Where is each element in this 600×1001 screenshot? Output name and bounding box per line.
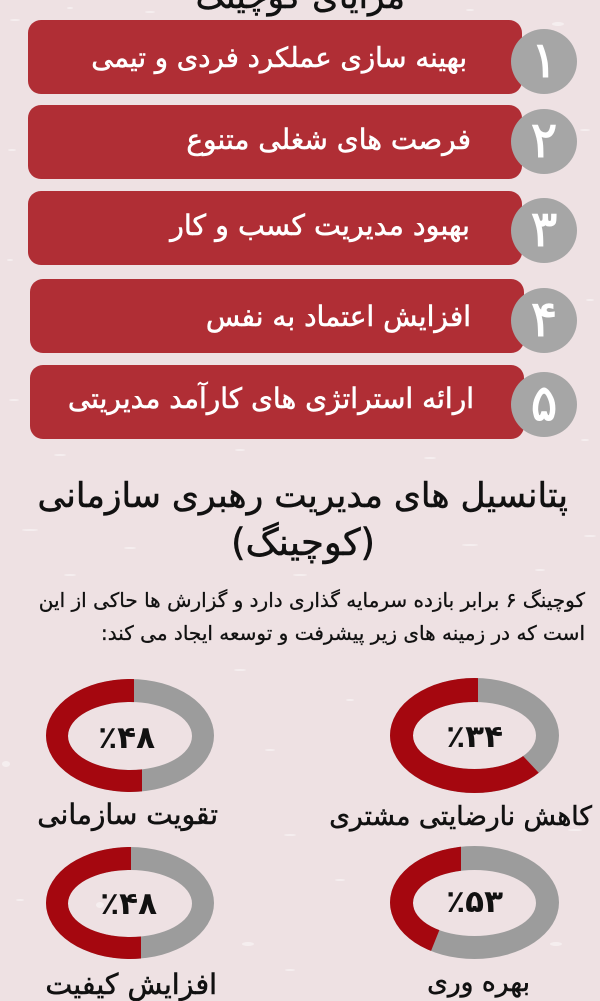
item 3 number: ۳ <box>531 200 557 258</box>
label: organisational strengthening: تقویت سازمانی <box>37 798 218 831</box>
section heading <box>38 476 568 564</box>
heading line 1: پتانسیل های مدیریت رهبری سازمانی <box>38 476 568 516</box>
list item 1 <box>28 20 577 94</box>
item 4 number: ۴ <box>531 290 557 348</box>
item 2 text: فرصت های شغلی متنوع <box>186 123 471 156</box>
item 5 number <box>511 372 577 437</box>
donut: productivity 53 <box>390 846 559 959</box>
value: 48 percent quality: ٪۴۸ <box>100 886 157 922</box>
item 5 bar <box>30 365 524 439</box>
item 4 text: افزایش اعتماد به نفس <box>206 300 471 333</box>
list item 3 <box>28 191 577 265</box>
item 4 number <box>511 288 577 353</box>
item 1 number: ۱ <box>531 31 557 89</box>
paragraph line 2: است که در زمینه های زیر پیشرفت و توسعه ایجاد می کند: <box>101 621 585 645</box>
paragraph line 1: کوچینگ ۶ برابر بازده سرمایه گذاری دارد و گزارش ها حاکی از این <box>39 588 585 612</box>
value: 53 percent: ٪۵۳ <box>446 884 503 920</box>
label: customer dissatisfaction: کاهش نارضایتی مشتری <box>329 801 592 832</box>
donut: quality improvement 48 <box>46 847 214 959</box>
label: productivity: بهره وری <box>427 967 530 998</box>
value: 34 percent: ٪۳۴ <box>446 719 503 755</box>
donut: organisational strengthening 48 <box>46 679 214 792</box>
heading line 2: (کوچینگ) <box>231 521 375 564</box>
donut: customer dissatisfaction 34 <box>390 678 559 793</box>
item 4 bar <box>30 279 524 353</box>
intro paragraph <box>39 588 586 646</box>
item 2 number: ۲ <box>531 111 557 169</box>
item 3 text: بهبود مدیریت کسب و کار <box>170 209 470 242</box>
list item 2 <box>28 105 577 179</box>
item 1 bar <box>28 20 522 94</box>
item 5 text: ارائه استراتژی های کارآمد مدیریتی <box>68 382 474 415</box>
item 3 number <box>511 198 577 263</box>
label: quality improvement: افزایش کیفیت <box>45 968 217 1001</box>
list item 4 <box>30 279 577 353</box>
item 5 number: ۵ <box>531 374 557 432</box>
item 2 number <box>511 109 577 174</box>
item 3 bar <box>28 191 522 265</box>
list item 5 <box>30 365 577 439</box>
item 2 bar <box>28 105 522 179</box>
item 1 text: بهینه سازی عملکرد فردی و تیمی <box>91 42 467 74</box>
item 1 number <box>511 29 577 94</box>
value: 48 percent organisation: ٪۴۸ <box>98 720 155 756</box>
